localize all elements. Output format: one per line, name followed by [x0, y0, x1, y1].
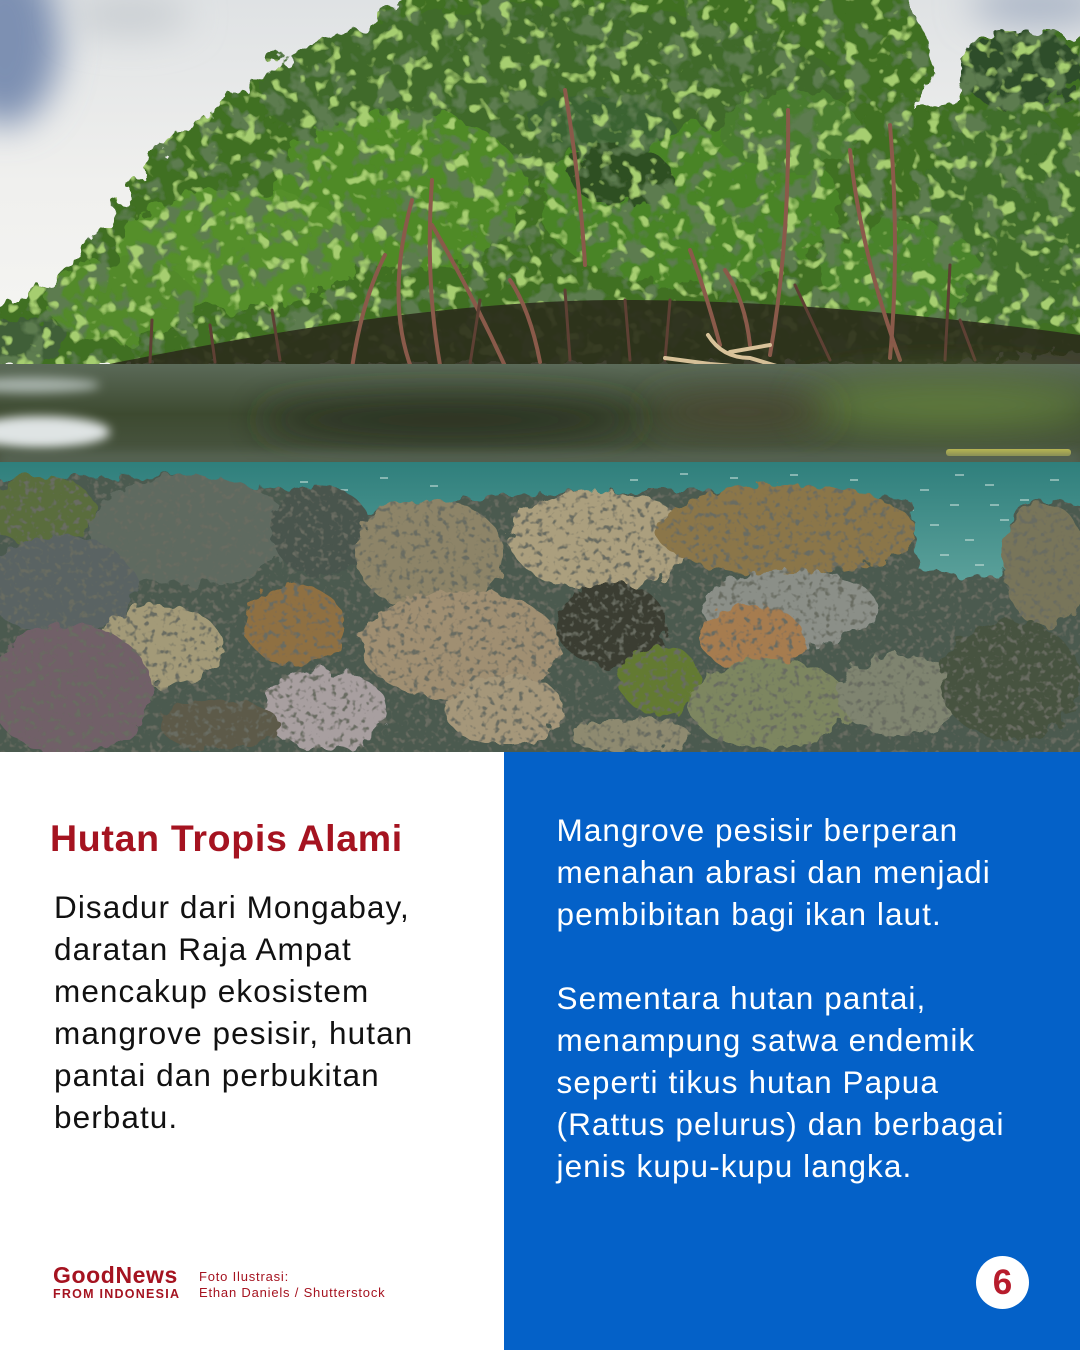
text block: mangrove and coastal forest description: menampung satwa endemik — [556, 1022, 975, 1058]
shoal of fish — [300, 474, 1059, 565]
text block: intro — [54, 889, 413, 1135]
text block: mangrove and coastal forest description: Sementara hutan pantai, — [556, 980, 926, 1016]
driftwood — [665, 335, 790, 370]
text block: intro: pantai dan perbukitan — [54, 1057, 380, 1093]
text block: mangrove and coastal forest description: (Rattus pelurus) dan berbagai — [556, 1106, 1005, 1142]
text block: mangrove and coastal forest description: menahan abrasi dan menjadi — [556, 854, 991, 890]
logo: GoodNews from Indonesia — [53, 1262, 180, 1301]
logo: GoodNews from Indonesia: GoodNews — [53, 1262, 178, 1288]
text block: intro: daratan Raja Ampat — [54, 931, 352, 967]
text block: mangrove and coastal forest description: seperti tikus hutan Papua — [556, 1064, 939, 1100]
page number badge: 6 — [993, 1263, 1012, 1302]
mangrove roots — [100, 90, 1080, 370]
text block: intro: berbatu. — [54, 1099, 178, 1135]
text block: mangrove and coastal forest description — [556, 812, 1005, 1184]
photo credit — [199, 1269, 385, 1300]
photo credit: Foto Ilustrasi: — [199, 1269, 289, 1284]
mangrove canopy — [0, 0, 1080, 365]
photo credit: Ethan Daniels / Shutterstock — [199, 1285, 385, 1300]
sky — [0, 0, 1080, 370]
text block: mangrove and coastal forest description: pembibitan bagi ikan laut. — [556, 896, 942, 932]
underwater — [0, 462, 1080, 752]
coral reef — [0, 475, 1080, 820]
logo: GoodNews from Indonesia: FROM INDONESIA — [53, 1287, 180, 1301]
text block: intro: mangrove pesisir, hutan — [54, 1015, 413, 1051]
panel: blue text panel — [504, 752, 1080, 1350]
page number badge — [976, 1256, 1029, 1309]
text block: mangrove and coastal forest description: jenis kupu-kupu langka. — [556, 1148, 912, 1184]
water surface reflection — [0, 364, 1080, 466]
text block: intro: Disadur dari Mongabay, — [54, 889, 410, 925]
heading: Hutan Tropis Alami — [50, 817, 403, 859]
text block: intro: mencakup ekosistem — [54, 973, 369, 1009]
text block: mangrove and coastal forest description: Mangrove pesisir berperan — [556, 812, 958, 848]
photo: mangrove forest above water and coral reef below — [0, 0, 1080, 752]
